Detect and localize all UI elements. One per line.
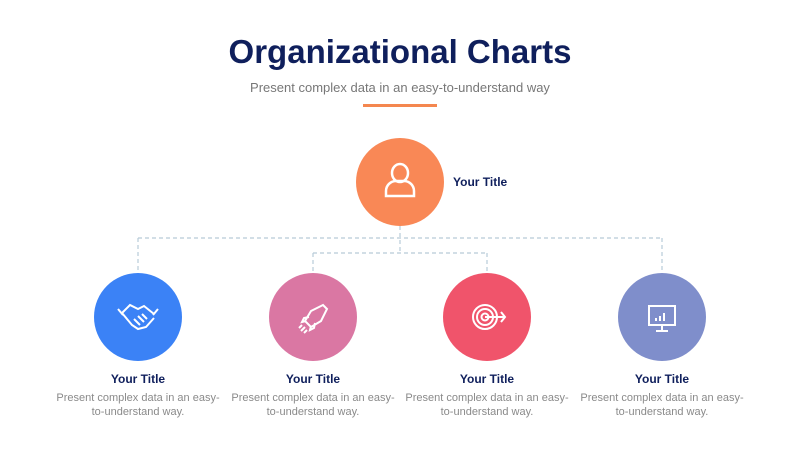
top node [356, 138, 507, 226]
icon: monitor chart [618, 273, 706, 361]
node 4 [580, 273, 744, 418]
label: Your Title [635, 372, 689, 386]
text: Present complex data in an easy- [405, 392, 569, 404]
node 3 [405, 273, 569, 418]
text [56, 392, 220, 418]
label: Your Title [460, 372, 514, 386]
text: to-understand way. [92, 406, 184, 418]
accent line [363, 104, 437, 107]
text [580, 392, 744, 418]
text [231, 392, 395, 418]
text: Present complex data in an easy- [231, 392, 395, 404]
icon: rocket [269, 273, 357, 361]
label: Your Title [286, 372, 340, 386]
text [405, 392, 569, 418]
icon: handshake [94, 273, 182, 361]
subtitle: Present complex data in an easy-to-understand way [250, 80, 550, 95]
node 2 [231, 273, 395, 418]
label: Your Title [111, 372, 165, 386]
text: to-understand way. [441, 406, 533, 418]
node 1 [56, 273, 220, 418]
icon: target [443, 273, 531, 361]
text: Present complex data in an easy- [580, 392, 744, 404]
icon: person [356, 138, 444, 226]
title: Organizational Charts [229, 33, 571, 70]
text: to-understand way. [267, 406, 359, 418]
top label: Your Title [453, 175, 507, 189]
text: to-understand way. [616, 406, 708, 418]
text: Present complex data in an easy- [56, 392, 220, 404]
